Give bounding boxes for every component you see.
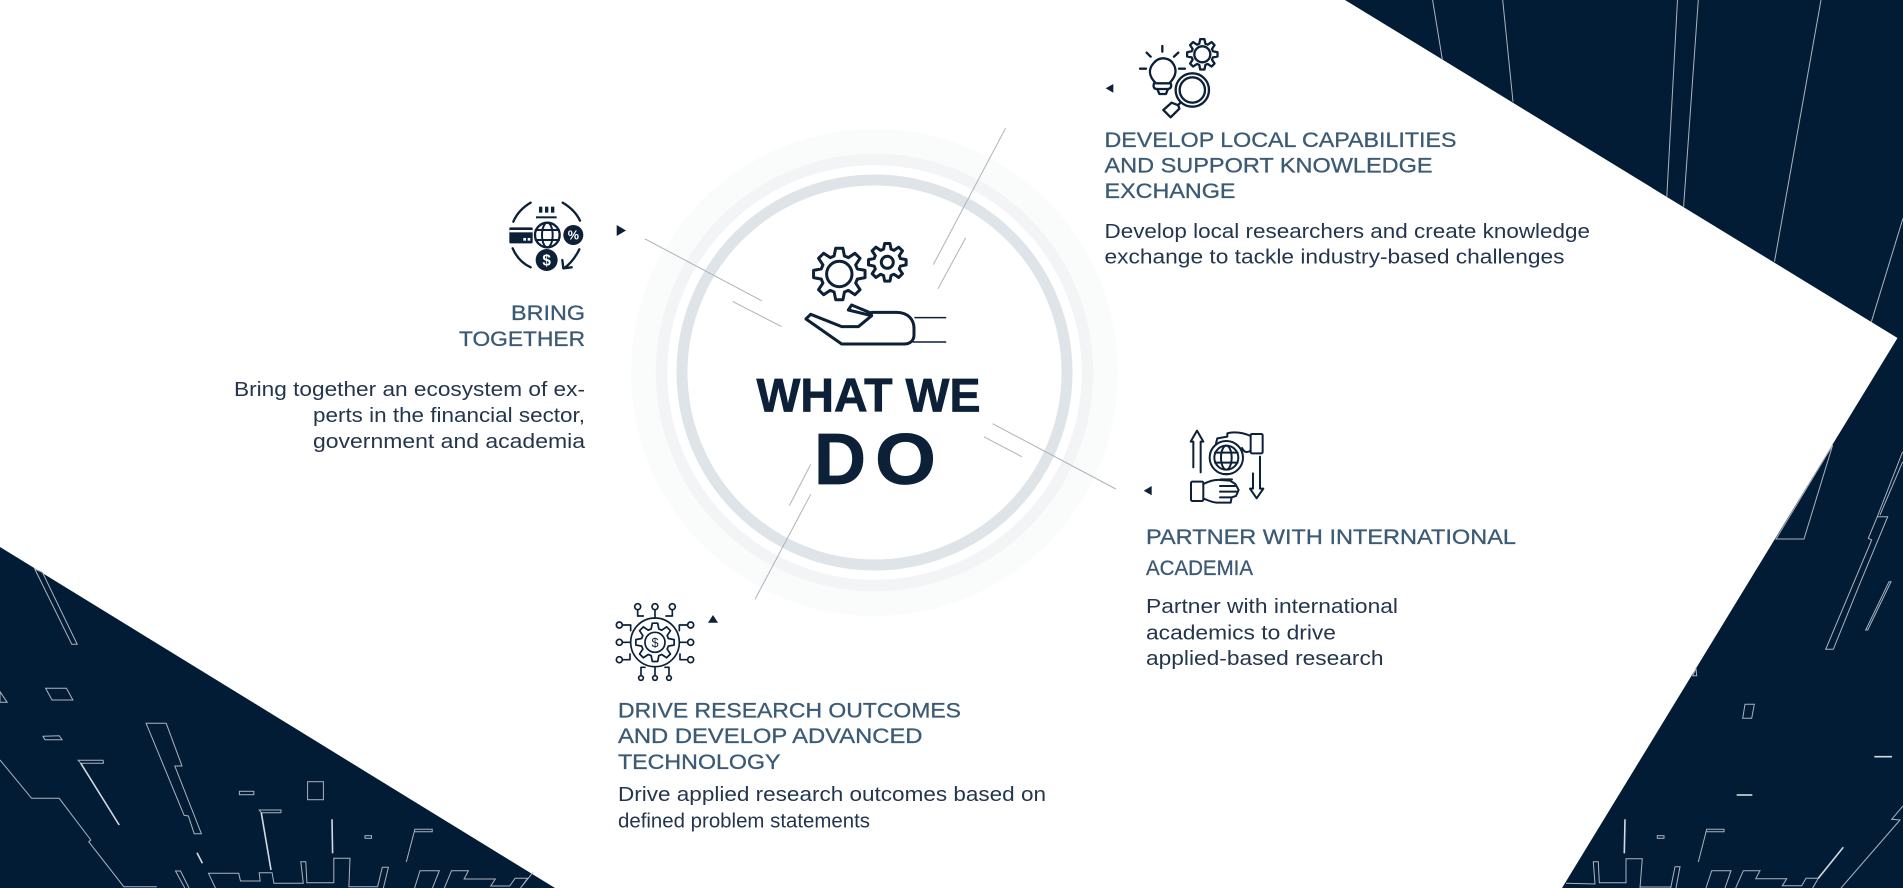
panel: bring together xyxy=(234,203,626,453)
marker arrow xyxy=(617,225,626,236)
icon: finance globe: $ xyxy=(542,252,551,269)
body text: government and academia xyxy=(313,430,586,453)
body text: defined problem statements xyxy=(618,810,870,832)
body text xyxy=(234,378,586,453)
body text xyxy=(1104,220,1590,268)
icon: hands with globe and arrows xyxy=(1191,431,1263,503)
body text xyxy=(1146,595,1398,670)
body text: applied-based research xyxy=(1146,647,1384,670)
panel: partner with international academia xyxy=(1144,431,1516,670)
title xyxy=(756,369,980,500)
heading: AND DEVELOP ADVANCED xyxy=(618,724,922,748)
central ring graphic xyxy=(644,142,1106,604)
title: WHAT WE xyxy=(756,369,980,422)
heading xyxy=(1146,525,1516,580)
body text: academics to drive xyxy=(1146,622,1336,644)
panel: develop local capabilities xyxy=(1104,39,1590,269)
icon: circuit gear with dollar: $ xyxy=(651,636,659,650)
heading xyxy=(1104,128,1456,203)
heading: DRIVE RESEARCH OUTCOMES xyxy=(618,698,961,722)
body text: Drive applied research outcomes based on xyxy=(618,783,1046,806)
icon: finance globe xyxy=(509,203,583,271)
heading: BRING xyxy=(511,301,585,325)
background: top right navy panel xyxy=(1345,0,1903,888)
body text: Bring together an ecosystem of ex- xyxy=(234,378,585,401)
marker arrow xyxy=(1106,84,1113,93)
body text: Develop local researchers and create knowledge xyxy=(1104,220,1590,243)
marker arrow xyxy=(708,615,718,623)
heading: AND SUPPORT KNOWLEDGE xyxy=(1104,154,1432,178)
heading: ACADEMIA xyxy=(1146,556,1254,580)
heading: PARTNER WITH INTERNATIONAL xyxy=(1146,525,1516,549)
icon: finance globe: % xyxy=(568,228,579,242)
icon: circuit gear with dollar xyxy=(616,604,694,680)
title: O xyxy=(875,420,936,500)
heading: TECHNOLOGY xyxy=(618,750,780,774)
marker arrow xyxy=(1144,486,1152,495)
heading xyxy=(618,698,961,774)
heading: TOGETHER xyxy=(459,327,585,351)
icon: hand holding gears xyxy=(806,243,946,344)
title: D xyxy=(814,420,866,500)
icon: bulb gear magnifier xyxy=(1140,39,1217,117)
background: bottom left navy panel xyxy=(0,547,555,888)
body text xyxy=(618,783,1046,832)
body text: perts in the financial sector, xyxy=(313,404,585,427)
body text: Partner with international xyxy=(1146,595,1398,618)
body text: exchange to tackle industry-based challenges xyxy=(1104,246,1564,268)
heading xyxy=(459,301,585,351)
heading: EXCHANGE xyxy=(1104,179,1236,203)
panel: drive research outcomes xyxy=(616,604,1046,832)
heading: DEVELOP LOCAL CAPABILITIES xyxy=(1104,128,1456,152)
connector lines xyxy=(645,128,1116,599)
